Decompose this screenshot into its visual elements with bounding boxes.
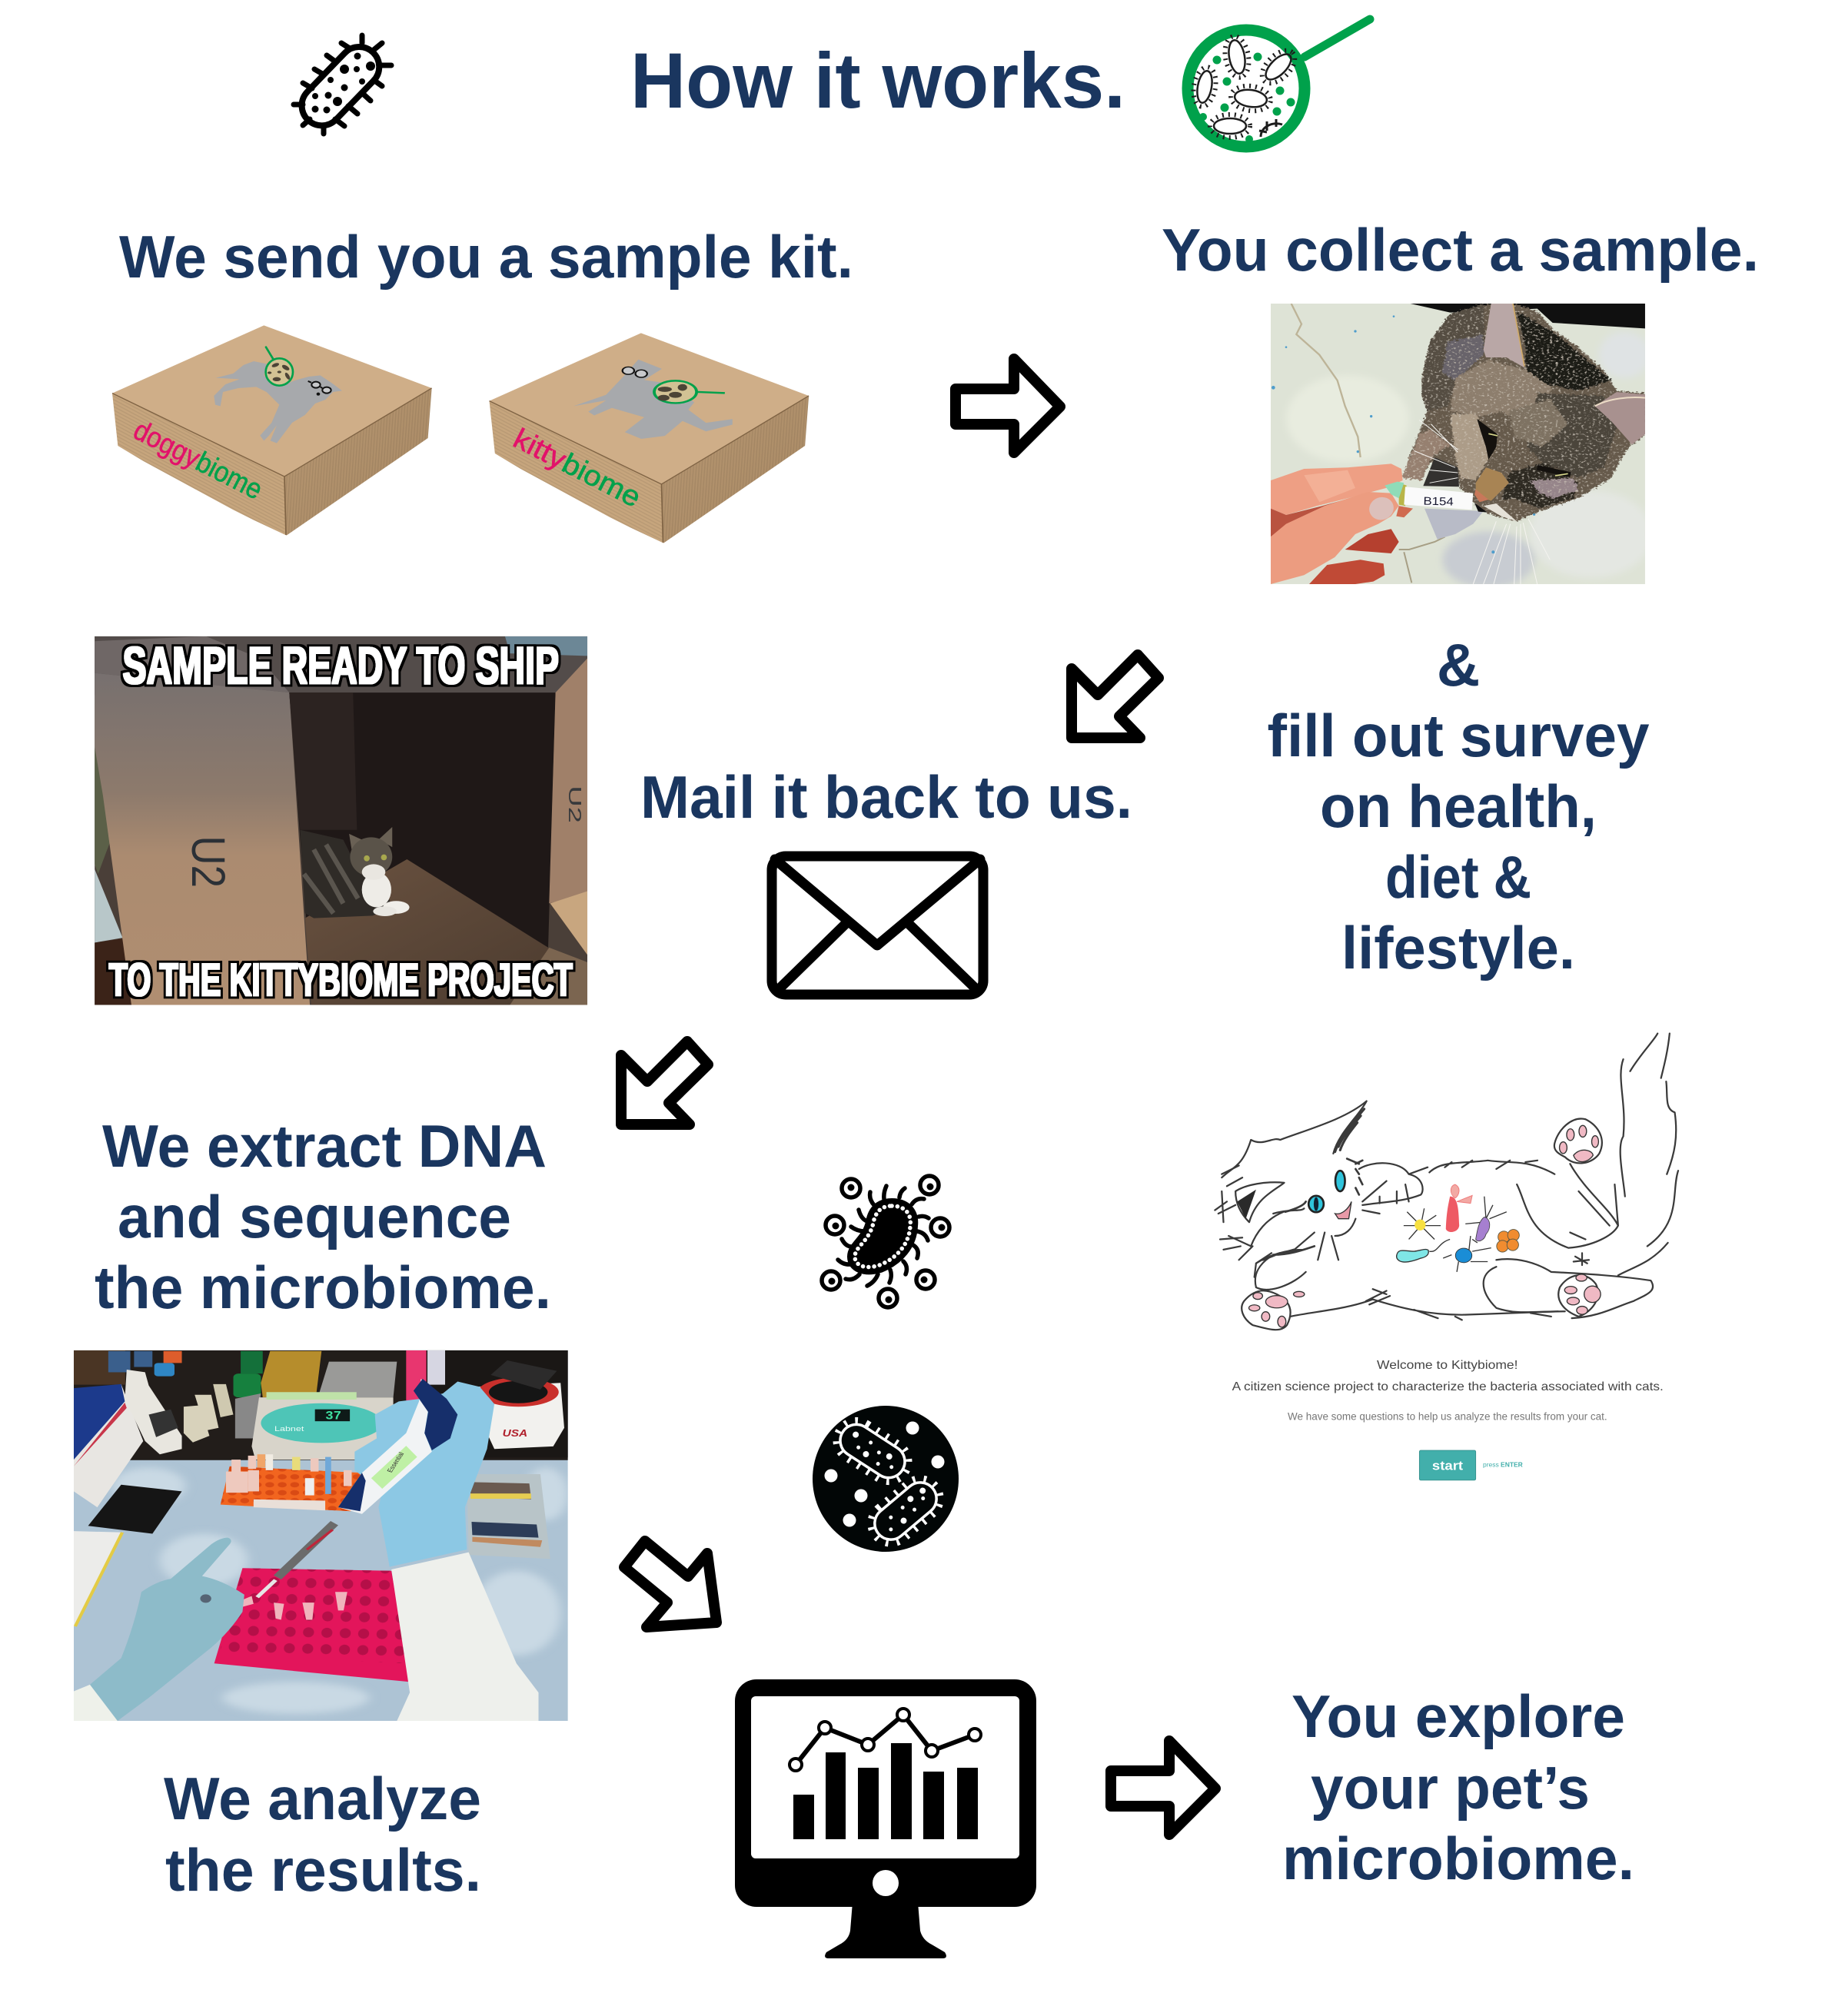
text block: fill out survey: lifestyle.	[1341, 914, 1575, 981]
right hand glove	[354, 1381, 494, 1567]
bottles	[125, 1351, 263, 1454]
text block: we analyze the results: We analyze	[164, 1765, 481, 1832]
photo: lab pipetting	[74, 1350, 568, 1721]
icon: computer monitor with chart	[735, 1679, 1036, 1958]
arrow: right to explore	[1111, 1741, 1215, 1835]
text block: you explore your pet's microbiome: You explore	[1292, 1682, 1625, 1750]
cat silhouette	[573, 360, 733, 439]
illustration: survey welcome screen with cat: start	[1432, 1458, 1463, 1473]
text block: we extract DNA	[95, 1112, 551, 1321]
text block: we extract DNA: the microbiome.	[95, 1254, 551, 1321]
text block: we analyze the results: the results.	[165, 1836, 481, 1904]
box left	[74, 1384, 143, 1507]
start button	[1419, 1450, 1476, 1480]
icon: circle with bacteria	[813, 1406, 959, 1552]
welcome text	[1232, 1358, 1664, 1422]
hand	[1271, 463, 1403, 515]
text block: you explore your pet's microbiome: microbiome.	[1282, 1825, 1634, 1892]
photo: meme cat in shipping box	[95, 636, 587, 1005]
welcome text: A citizen science project to characterize the bacteria associated with cats.	[1232, 1380, 1664, 1393]
cat in box	[300, 827, 410, 918]
heading: we send you a sample kit: We send you a sample kit.	[119, 223, 853, 291]
text block: fill out survey: on health,	[1320, 772, 1597, 840]
welcome text: Welcome to Kittybiome!	[1377, 1358, 1518, 1372]
image: doggybiome kit box	[112, 325, 432, 536]
sample vial	[1399, 483, 1407, 506]
text block: we extract DNA: and sequence	[118, 1183, 511, 1250]
image: doggybiome kit box: doggybiome	[128, 414, 268, 506]
arrow: right to sample photo	[956, 359, 1060, 453]
meme caption top: SAMPLE READY TO SHIP	[122, 636, 559, 696]
pipette body	[338, 1379, 434, 1514]
text block: we analyze the results	[164, 1765, 481, 1904]
icon: magnifier with microbes	[1188, 19, 1370, 147]
arrow: down-left to mail	[1072, 655, 1159, 738]
icon: envelope	[772, 856, 983, 995]
dry bath instrument	[251, 1397, 394, 1460]
whiskers	[1414, 420, 1550, 584]
cat	[1401, 304, 1645, 521]
photo: lab pipetting: Labnet	[274, 1425, 304, 1433]
cartoon bacteria	[1397, 1184, 1519, 1272]
text block: you explore your pet's microbiome	[1282, 1682, 1634, 1892]
photo: cat being sampled	[1271, 304, 1653, 588]
photo: lab pipetting: Essential	[385, 1451, 406, 1473]
arrow: down-right to analysis	[624, 1541, 716, 1627]
meme caption bottom: TO THE KITTYBIOME PROJECT	[109, 954, 573, 1005]
pipette shaft	[278, 1523, 334, 1577]
image: kittybiome kit box	[489, 333, 809, 543]
left hand glove	[90, 1538, 244, 1721]
text block: fill out survey: fill out survey	[1267, 702, 1650, 769]
right machine	[406, 1350, 568, 1457]
heading: you collect a sample: You collect a sample.	[1162, 216, 1759, 284]
paw pads	[1249, 1125, 1601, 1327]
photo: lab pipetting: USA	[503, 1428, 527, 1439]
text block: fill out survey	[1267, 631, 1650, 981]
press enter hint: press ENTER	[1483, 1461, 1523, 1468]
line chart	[790, 1709, 981, 1771]
text block: we extract DNA: We extract DNA	[102, 1112, 547, 1180]
text block: you explore your pet's microbiome: your pet’s	[1311, 1754, 1590, 1822]
pink tube rack	[214, 1568, 411, 1682]
photo: meme cat in shipping box: U2	[182, 835, 234, 888]
gel box	[467, 1474, 550, 1559]
title: How it works.	[630, 37, 1125, 125]
dog silhouette	[214, 361, 342, 443]
image: kittybiome kit box: kittybiome	[508, 423, 646, 513]
text block: fill out survey: diet &	[1385, 843, 1531, 911]
icon: microbe with spores	[822, 1176, 949, 1307]
icon: bacterium	[294, 35, 391, 134]
welcome text: We have some questions to help us analyze the results from your cat.	[1288, 1410, 1607, 1422]
text block: fill out survey: &	[1437, 631, 1480, 699]
heading: mail it back to us: Mail it back to us.	[640, 763, 1132, 831]
arrow: down-left to DNA step	[621, 1041, 708, 1124]
right sleeve	[391, 1553, 538, 1721]
sample tubes	[243, 1592, 347, 1620]
cat line drawing	[1215, 1034, 1678, 1330]
orange rack	[221, 1466, 362, 1511]
bar chart	[793, 1743, 978, 1839]
photo: meme cat in shipping box: U2	[565, 785, 585, 823]
illustration: survey welcome screen with cat	[1215, 1034, 1678, 1480]
photo: cat being sampled: B154	[1423, 496, 1454, 509]
photo: lab pipetting: 37	[325, 1410, 341, 1423]
